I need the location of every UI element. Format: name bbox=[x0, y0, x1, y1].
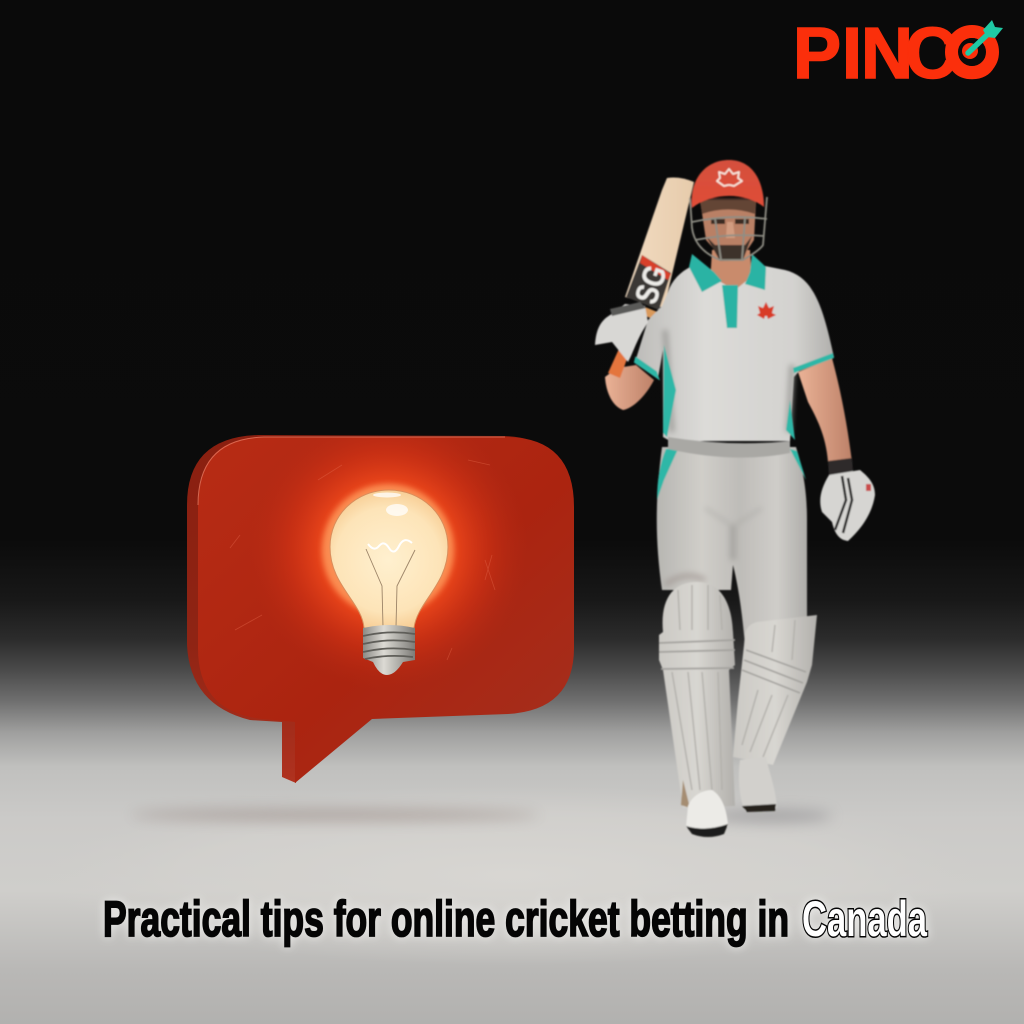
trouser teal side panels bbox=[657, 449, 806, 500]
right batting glove bbox=[820, 470, 875, 541]
bat sticker with SG label: SG bbox=[628, 261, 674, 308]
bubble surface scratches bbox=[230, 460, 495, 660]
shirt bbox=[635, 266, 834, 441]
face features bbox=[700, 198, 756, 261]
bubble front face bbox=[198, 437, 574, 783]
waistband bbox=[668, 437, 790, 458]
neck bbox=[710, 250, 752, 300]
front shoe bbox=[686, 790, 728, 837]
helmet maple leaf bbox=[717, 169, 742, 186]
logo wordmark: P bbox=[793, 14, 841, 94]
logo wordmark: N bbox=[861, 14, 913, 94]
trousers bbox=[657, 447, 807, 645]
bulb reflection bbox=[373, 492, 408, 516]
cricket player bbox=[595, 160, 875, 837]
bat handle bbox=[608, 307, 660, 378]
bulb halo bbox=[322, 484, 454, 616]
bubble side wall bbox=[187, 435, 570, 783]
rear leg pad bbox=[733, 615, 817, 765]
speech bubble with light bulb bbox=[187, 435, 574, 783]
logo wordmark: O bbox=[945, 15, 999, 93]
logo wordmark: C bbox=[905, 14, 957, 94]
helmet grille bbox=[690, 197, 767, 260]
batting glove on raised hand bbox=[595, 302, 648, 362]
shirt shading bbox=[665, 330, 792, 432]
title highlighted word: Canada bbox=[802, 891, 928, 947]
bat blade bbox=[625, 178, 694, 308]
light bulb bbox=[322, 484, 454, 675]
rear shoe bbox=[739, 757, 777, 812]
right wristband bbox=[828, 458, 853, 475]
logo wordmark: I bbox=[842, 14, 862, 94]
bulb filament bbox=[366, 540, 415, 627]
right arm bbox=[798, 358, 852, 462]
bulb glass bbox=[330, 490, 448, 628]
title bbox=[103, 891, 928, 947]
bubble glow around bulb bbox=[198, 437, 574, 783]
speech bubble shadow on floor bbox=[130, 809, 540, 821]
bubble highlight edge bbox=[198, 437, 505, 505]
face bbox=[700, 200, 756, 258]
shirt teal trims bbox=[635, 345, 834, 440]
player shadow on floor bbox=[708, 810, 832, 822]
shirt collar and placket bbox=[689, 254, 766, 328]
shirt maple leaf badge bbox=[757, 302, 776, 319]
helmet bbox=[692, 160, 764, 208]
trouser folds and shading bbox=[665, 508, 762, 585]
logo arrow bbox=[968, 20, 1003, 53]
bulb screw base bbox=[363, 625, 415, 675]
front leg pad bbox=[659, 582, 735, 808]
raised forearm bbox=[605, 365, 654, 410]
logo: PINCO with target and arrow bbox=[793, 14, 1003, 94]
logo target ring bbox=[952, 32, 992, 72]
bat bbox=[608, 178, 694, 378]
